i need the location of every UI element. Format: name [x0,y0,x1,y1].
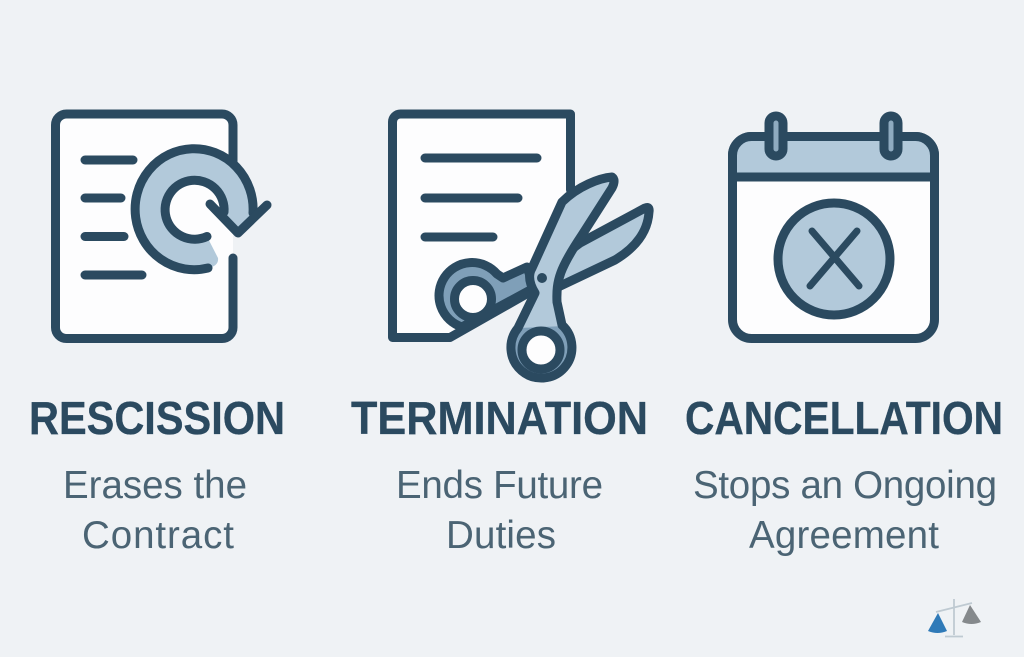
text: rescission description: Contract [82,514,234,557]
icon: document with scissors [392,114,649,378]
text: termination description: Ends Future [396,464,603,507]
text: cancellation description: Stops an Ongoing [693,464,997,507]
heading: rescission: RESCISSION [29,392,285,444]
text: cancellation description: Agreement [749,514,939,557]
panel: rescission [29,114,285,557]
text: rescission description: Erases the [63,464,247,507]
lower handle and upper blade [511,177,614,378]
icon: document with undo arrow [56,114,267,338]
icon: scales logo [928,599,981,636]
text: termination description: Duties [446,514,556,557]
panel: termination [351,114,649,557]
heading: termination: TERMINATION [351,392,648,444]
panel: cancellation [685,116,1003,557]
icon: calendar with x [732,116,934,338]
left handle [439,263,534,327]
right blade [540,208,649,288]
